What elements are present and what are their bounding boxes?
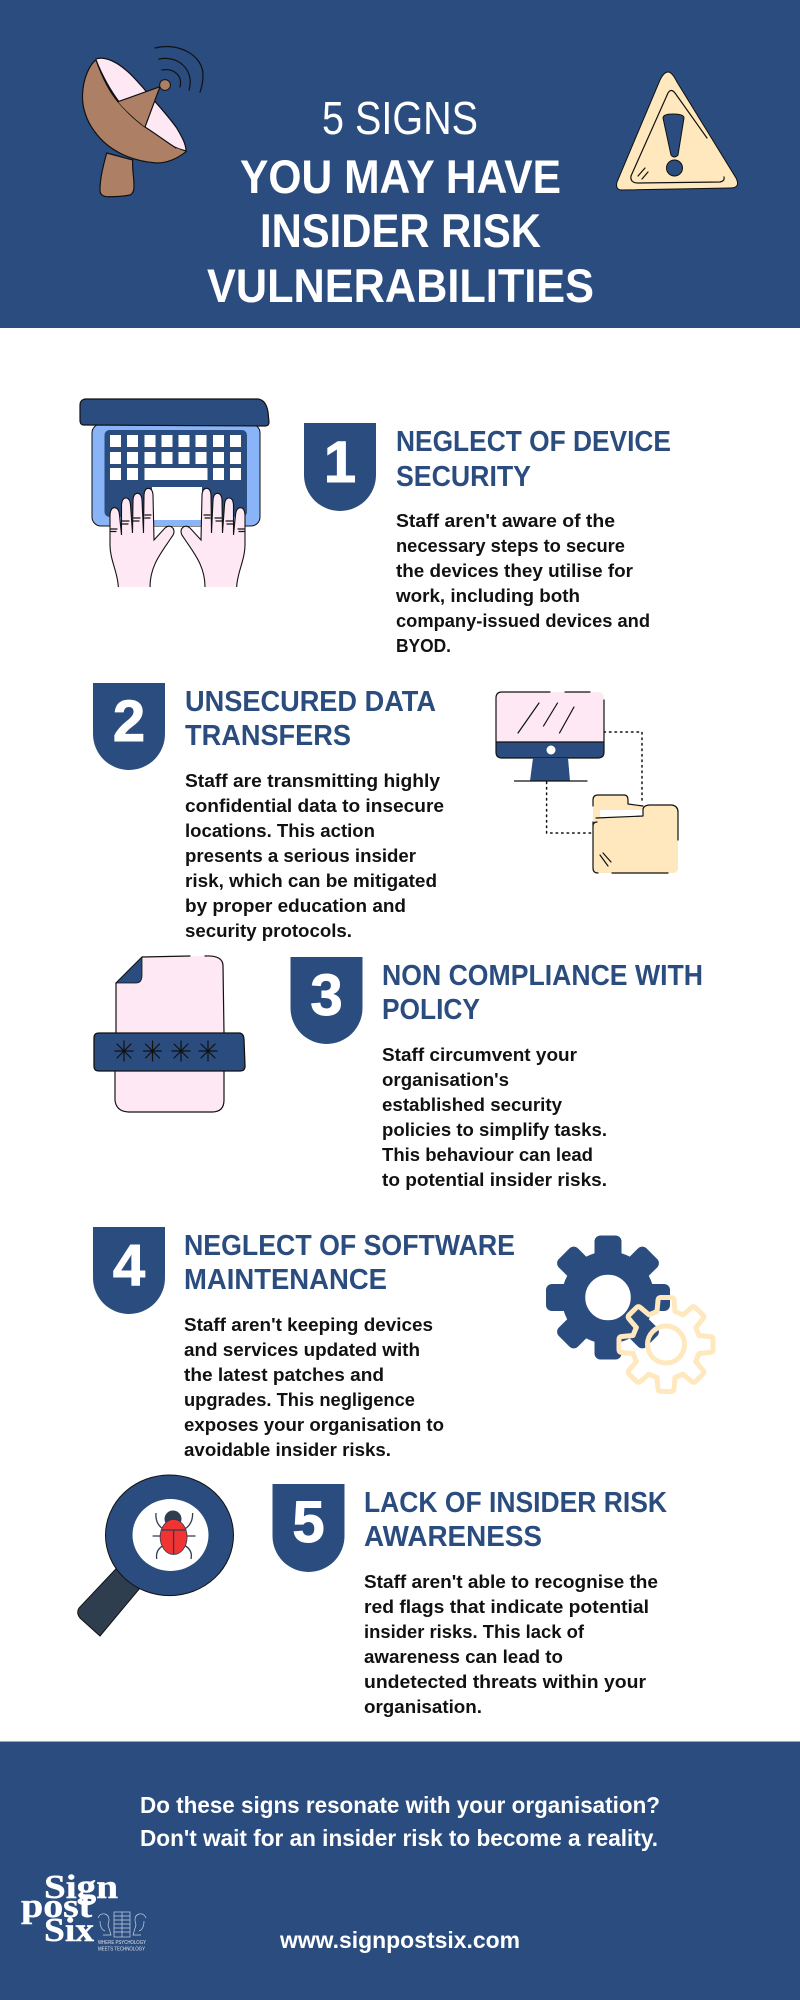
heading: sign 4: NEGLECT OF SOFTWARE [184, 1230, 515, 1262]
panel: footer banner [0, 1742, 800, 2000]
text: sign 4 description [184, 1315, 444, 1460]
logo: Signpost Six: post [21, 1888, 93, 1925]
text: sign 3 description: organisation's [382, 1070, 509, 1090]
panel: sign 2 [93, 683, 678, 941]
heading: sign 5: LACK OF INSIDER RISK [364, 1487, 667, 1519]
call to action text [140, 1792, 660, 1851]
icon: magnifying glass with bug [78, 1475, 233, 1636]
badge: number 4 [93, 1227, 165, 1314]
heading: sign 2: TRANSFERS [185, 720, 351, 752]
text: sign 5 description: insider risks. This lack of [364, 1622, 585, 1642]
text: sign 2 description: risk, which can be mitigated [185, 871, 437, 891]
text: sign 3 description: established security [382, 1095, 562, 1115]
title: 5 SIGNS [322, 92, 478, 144]
text: sign 4 description: and services updated with [184, 1340, 420, 1360]
title: INSIDER RISK [260, 204, 541, 257]
text: sign 2 description: presents a serious insider [185, 846, 416, 866]
call to action text: Don't wait for an insider risk to become a reality. [140, 1825, 658, 1851]
text: sign 3 description: to potential insider risks. [382, 1170, 607, 1190]
title: VULNERABILITIES [207, 259, 594, 312]
text: sign 4 description: the latest patches and [184, 1365, 384, 1385]
icon: password-protected document [94, 956, 245, 1112]
panel: sign 5 [272, 1484, 667, 1717]
text: sign 3 description: This behaviour can lead [382, 1145, 593, 1165]
text: sign 5 description [364, 1572, 658, 1717]
heading: sign 5: AWARENESS [364, 1521, 542, 1553]
badge: number 5 [272, 1484, 344, 1572]
logo: Signpost Six: MEETS TECHNOLOGY [98, 1946, 146, 1952]
badge: number 3: 3 [310, 963, 343, 1028]
text: sign 3 description [382, 1045, 607, 1190]
text: sign 5 description: awareness can lead to [364, 1647, 563, 1667]
badge: number 2: 2 [113, 689, 145, 754]
text: sign 2 description: confidential data to insecure [185, 796, 444, 816]
badge: number 3 [290, 957, 362, 1044]
heading: sign 4 [184, 1230, 515, 1296]
text: sign 5 description: undetected threats within your [364, 1672, 646, 1692]
icon: satellite dish [82, 47, 203, 197]
panel: header banner [0, 0, 800, 328]
text: sign 2 description: Staff are transmitting highly [185, 771, 440, 791]
heading: sign 3 [382, 960, 703, 1026]
text: sign 4 description: avoidable insider risks. [184, 1440, 391, 1460]
title: YOU MAY HAVE [240, 150, 561, 203]
icon: gears [546, 1236, 713, 1392]
text: sign 1 description: the devices they utilise for [396, 561, 633, 581]
logo: Signpost Six [21, 1869, 147, 1952]
logo: Signpost Six: WHERE PSYCHOLOGY [98, 1940, 147, 1946]
text: sign 1 description [395, 511, 650, 656]
text: sign 3 description: policies to simplify tasks. [382, 1120, 607, 1140]
icon: monitor and folder data transfer [496, 692, 678, 873]
text: sign 3 description: Staff circumvent your [382, 1045, 577, 1065]
heading: sign 5 [364, 1487, 667, 1553]
text: sign 5 description: organisation. [364, 1697, 482, 1717]
text: sign 4 description: upgrades. This negligence [184, 1390, 415, 1410]
heading: sign 1: NEGLECT OF DEVICE [396, 426, 671, 458]
panel: sign 3 [290, 957, 703, 1190]
logo: Signpost Six: Six [44, 1912, 94, 1949]
text: sign 4 description: exposes your organisation to [184, 1415, 444, 1435]
heading: sign 3: POLICY [382, 994, 480, 1026]
website url: www.signpostsix.com [279, 1927, 520, 1953]
text: sign 5 description: red flags that indicate potential [364, 1597, 649, 1617]
icon: laptop with typing hands [80, 399, 269, 587]
call to action text: Do these signs resonate with your organisation? [140, 1792, 660, 1818]
text: sign 1 description: Staff aren't aware of the [396, 511, 615, 531]
heading: sign 1 [396, 426, 671, 493]
text: sign 4 description: Staff aren't keeping devices [184, 1315, 433, 1335]
panel: sign 1 [304, 423, 671, 656]
text: sign 5 description: Staff aren't able to recognise the [364, 1572, 658, 1592]
badge: number 2 [93, 683, 165, 770]
heading: sign 3: NON COMPLIANCE WITH [382, 960, 703, 992]
text: sign 1 description: BYOD. [396, 636, 451, 656]
heading: sign 1: SECURITY [396, 461, 531, 493]
badge: number 4: 4 [113, 1233, 145, 1298]
text: sign 1 description: company-issued devices and [396, 611, 650, 631]
title [207, 92, 594, 312]
text: sign 2 description: locations. This action [185, 821, 375, 841]
heading: sign 2: UNSECURED DATA [185, 686, 436, 718]
text: sign 1 description: work, including both [395, 586, 580, 606]
text: sign 2 description [185, 771, 444, 941]
badge: number 1 [304, 423, 376, 511]
heading: sign 4: MAINTENANCE [184, 1264, 387, 1296]
panel: sign 4 [93, 1227, 713, 1460]
text: sign 1 description: necessary steps to secure [396, 536, 625, 556]
text: sign 2 description: security protocols. [185, 921, 352, 941]
heading: sign 2 [185, 686, 436, 752]
badge: number 1: 1 [324, 430, 356, 495]
logo: Signpost Six: Sign [44, 1869, 118, 1906]
text: sign 2 description: by proper education and [185, 896, 406, 916]
icon: warning triangle [617, 72, 738, 190]
badge: number 5: 5 [292, 1490, 325, 1555]
